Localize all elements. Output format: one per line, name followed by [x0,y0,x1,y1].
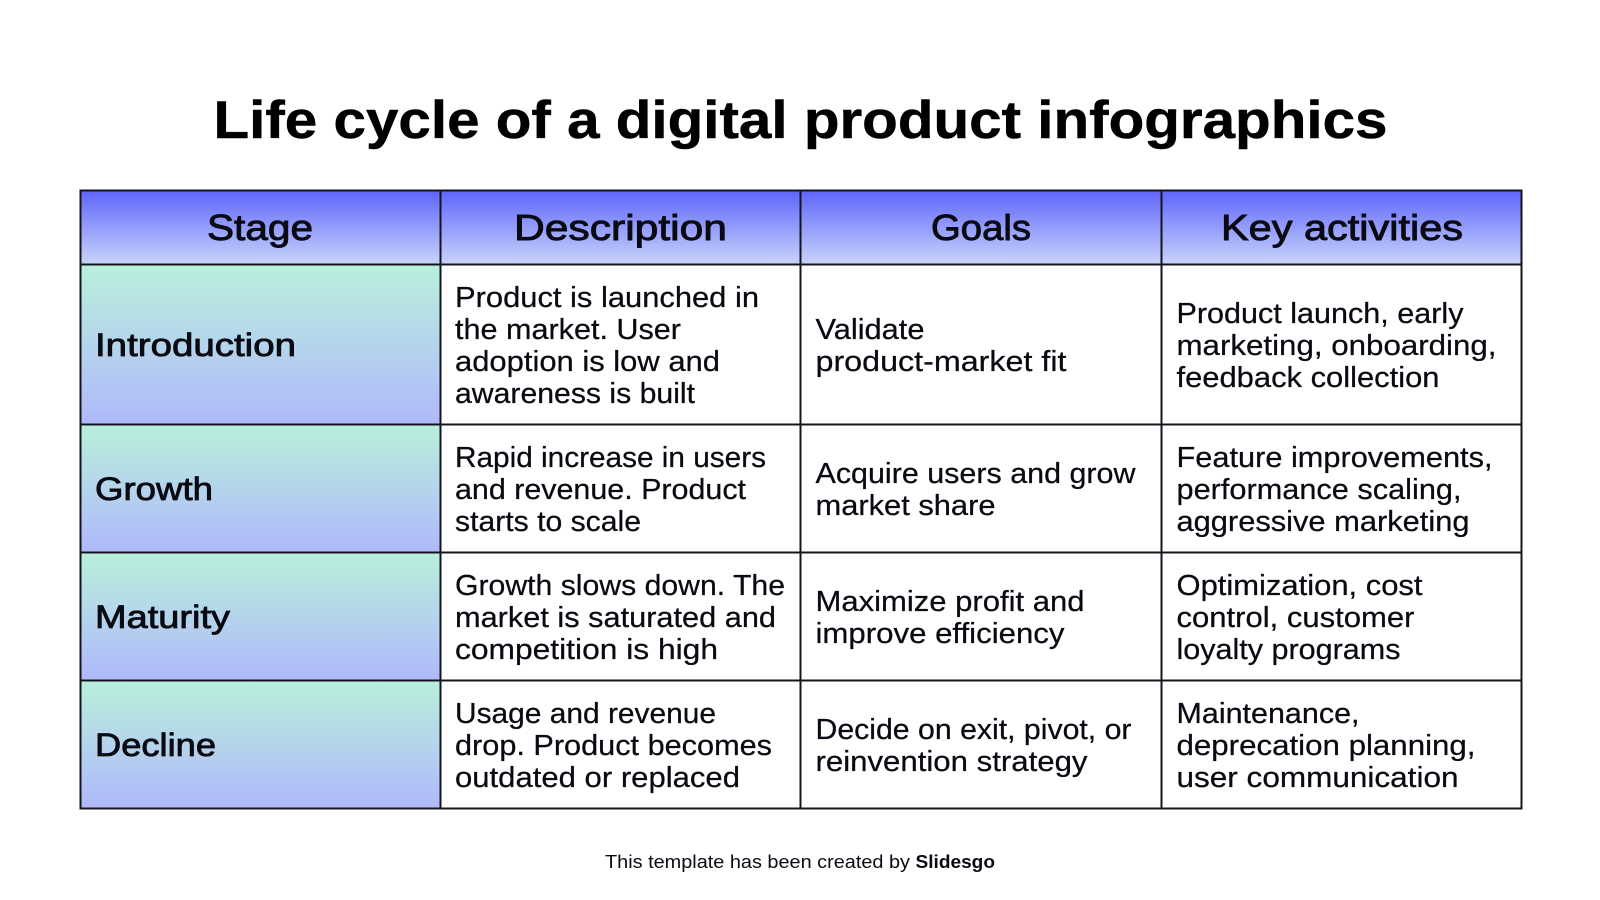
activities: Introduction: feedback collection [1176,362,1440,394]
row: Growth [81,425,1492,552]
header: Stage: Stage [207,207,313,248]
description: Introduction: the market. User [455,314,682,346]
description: Maturity [455,570,785,666]
goals: Decline: reinvention strategy [816,746,1088,778]
stage label: Decline: Decline [95,727,216,763]
goals: Decline: Decide on exit, pivot, or [816,714,1132,746]
header row [81,191,1521,264]
stage label: Maturity: Maturity [95,599,230,635]
goals: Decline [816,714,1132,778]
description: Growth: Rapid increase in users [455,442,766,474]
description: Decline: outdated or replaced [455,762,740,794]
description: Maturity: market is saturated and [455,602,776,634]
stage label: Introduction: Introduction [95,327,296,363]
header: Key activities: Key activities [1221,207,1463,248]
stage label: Growth: Growth [95,471,213,507]
description: Growth: starts to scale [455,506,641,538]
description: Growth: and revenue. Product [455,474,746,506]
description: Growth [455,442,766,538]
activities: Introduction: Product launch, early [1176,298,1464,330]
description: Introduction: adoption is low and [455,346,720,378]
activities: Maturity [1176,570,1423,666]
goals: Introduction: product-market fit [816,346,1067,378]
activities: Introduction: marketing, onboarding, [1176,330,1496,362]
activities: Growth: performance scaling, [1176,474,1462,506]
activities: Introduction [1176,298,1496,394]
description: Maturity: Growth slows down. The [455,570,785,602]
goals: Maturity: Maximize profit and [816,586,1084,618]
activities: Decline [1176,698,1476,794]
goals: Growth: Acquire users and grow [816,458,1136,490]
activities: Maturity: loyalty programs [1176,634,1400,666]
activities: Decline: deprecation planning, [1176,730,1476,762]
goals: Introduction [816,314,1067,378]
goals: Maturity [816,586,1084,650]
row: Introduction [81,265,1496,424]
description: Introduction: Product is launched in [455,282,759,314]
description: Decline: Usage and revenue [455,698,716,730]
row: Maturity [81,553,1423,680]
title: Life cycle of a digital product infographics [214,91,1388,150]
activities: Maturity: control, customer [1176,602,1415,634]
activities: Maturity: Optimization, cost [1176,570,1423,602]
footer credit: Slidesgo [916,851,995,872]
description: Introduction: awareness is built [455,378,695,410]
footer credit: This template has been created by [605,852,910,872]
description: Decline: drop. Product becomes [455,730,772,762]
goals: Growth: market share [816,490,996,522]
description: Introduction [455,282,759,410]
activities: Growth: Feature improvements, [1176,442,1492,474]
activities: Decline: Maintenance, [1176,698,1360,730]
goals: Growth [816,458,1136,522]
goals: Maturity: improve efficiency [816,618,1065,650]
activities: Decline: user communication [1176,762,1458,794]
footer credit [605,851,995,872]
activities: Growth [1176,442,1492,538]
activities: Growth: aggressive marketing [1176,506,1470,538]
description: Decline [455,698,772,794]
header: Goals: Goals [931,207,1031,248]
header: Description: Description [514,207,727,248]
goals: Introduction: Validate [816,314,924,346]
description: Maturity: competition is high [455,634,718,666]
table [80,190,1522,808]
row: Decline [81,681,1476,808]
